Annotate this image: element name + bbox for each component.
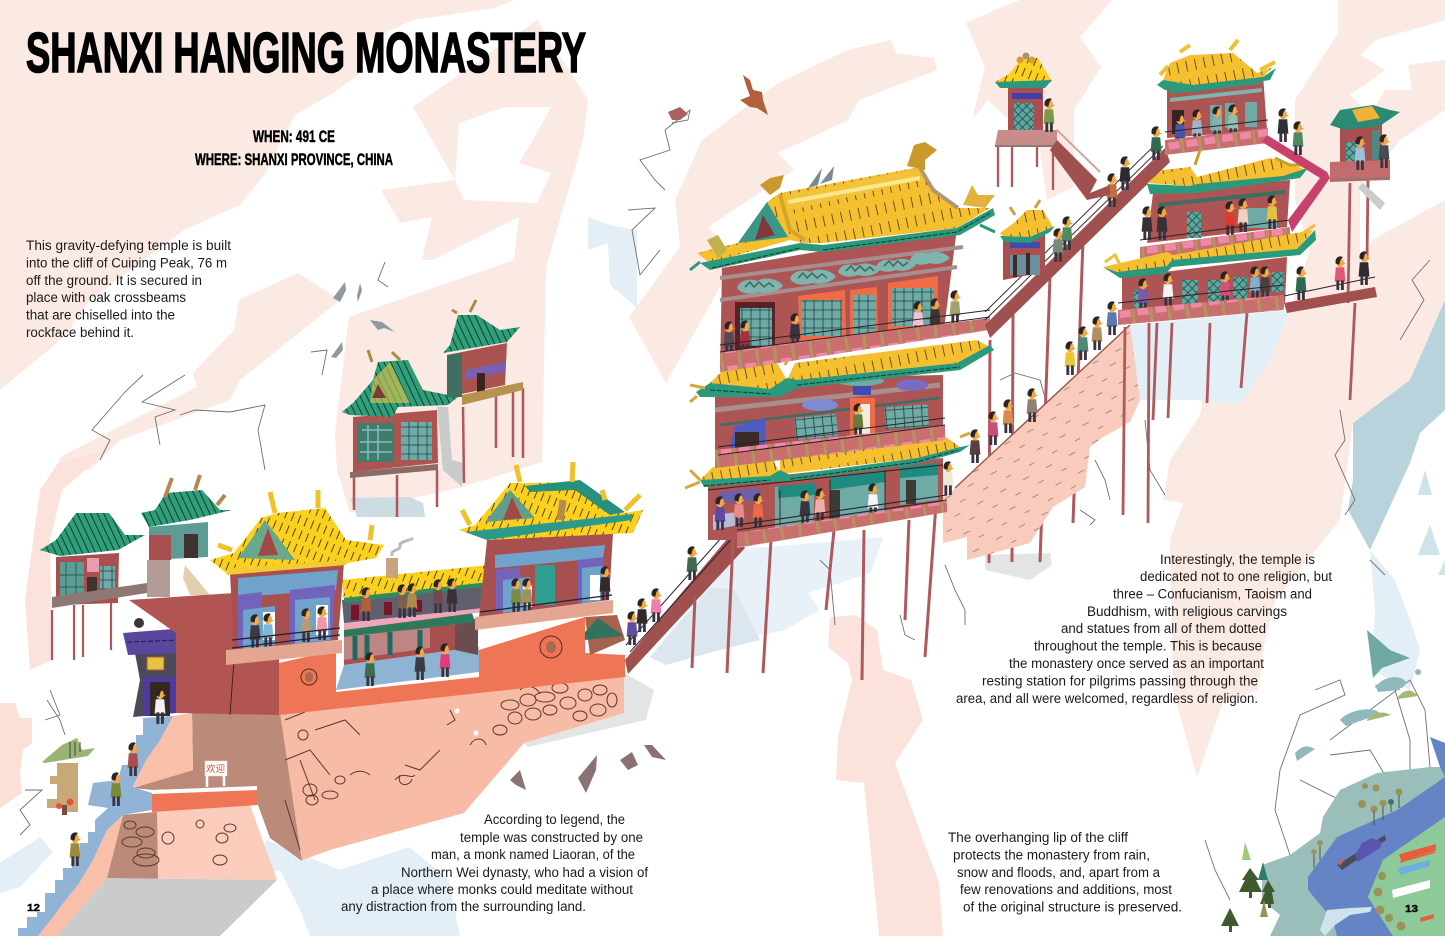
courtyard gallery with yellow roof: [336, 538, 489, 692]
long stair from main temple to upper temple: [985, 126, 1170, 338]
lower stair with visitors to the main temple: [625, 528, 745, 674]
text block: legend of Liaoran: According to legend, the: [484, 812, 625, 827]
text block: overhanging lip: of the original structure is preserved.: [963, 900, 1182, 914]
page number left: 12: [27, 902, 40, 914]
text block: gravity-defying temple: [26, 238, 231, 340]
left blue hall: [210, 490, 384, 665]
blue stone staircase and walkers: [18, 690, 173, 936]
small tower at top with stair: [995, 52, 1110, 200]
text block: gravity-defying temple: into the cliff of Cuiping Peak, 76 m: [26, 256, 227, 270]
welcome sign: [205, 761, 227, 787]
grey oar under right tower: [1358, 183, 1385, 210]
text block: gravity-defying temple: off the ground. It is secured in: [26, 273, 202, 288]
birds below the wall: [510, 745, 666, 793]
text block: three religions: the monastery once served as an important: [1009, 656, 1264, 671]
fortress wall: [129, 593, 625, 715]
text block: overhanging lip: The overhanging lip of the cliff: [948, 830, 1128, 845]
main temple: top storey: [720, 228, 990, 372]
text block: three religions: dedicated not to one religion, but: [1140, 569, 1332, 584]
welcome sign: 欢迎: [206, 763, 226, 775]
text block: legend of Liaoran: temple was constructed by one: [460, 830, 643, 845]
far left towers with walkway: [40, 475, 232, 660]
text block: legend of Liaoran: any distraction from the surrounding land.: [341, 899, 586, 914]
main temple stilts: [692, 240, 1083, 680]
text block: legend of Liaoran: man, a monk named Liaoran, of the: [431, 847, 635, 862]
birds around the middle pavilion: [331, 282, 395, 358]
text block: three religions: resting station for pilgrims passing through the: [982, 674, 1258, 688]
main temple: lower roof: [685, 433, 970, 488]
text block: three religions: three – Confucianism, Taoism and: [1113, 586, 1312, 602]
text block: three religions: area, and all were welcomed, regardless of religion.: [956, 691, 1258, 706]
title: SHANXI HANGING MONASTERY: [26, 21, 586, 85]
pink stairs to right tower: [1262, 108, 1330, 232]
text block: legend of Liaoran: [341, 812, 648, 914]
upper temple: middle storey: [1140, 150, 1308, 260]
text block: overhanging lip: snow and floods, and, apart from a: [957, 865, 1161, 880]
text block: three religions: and statues from all of them dotted: [1061, 621, 1266, 636]
text block: three religions: Interestingly, the temple is: [1160, 552, 1315, 567]
river valley landscape: [1221, 630, 1445, 936]
text block: gravity-defying temple: This gravity-defying temple is built: [26, 238, 231, 253]
text block: legend of Liaoran: Northern Wei dynasty, who had a vision of: [401, 865, 648, 880]
text block: gravity-defying temple: rockface behind it.: [26, 325, 134, 340]
text block: gravity-defying temple: that are chiselled into the: [26, 308, 175, 322]
right tower: [1330, 105, 1400, 182]
upper temple: lower storey and walkway: [1103, 225, 1377, 325]
text block: overhanging lip: [948, 830, 1182, 914]
main temple: middle roof: [690, 340, 994, 402]
text block: three religions: [956, 552, 1332, 706]
small pavilions on the upper left cliff: [342, 300, 523, 517]
upper temple: top pavilion: [1157, 40, 1276, 155]
main temple: upper roof with dragons and pigeons: [690, 142, 995, 270]
gate house: [123, 618, 186, 722]
date and place heading: WHERE: SHANXI PROVINCE, CHINA: [195, 150, 393, 169]
small temple beside long stair: [1000, 200, 1055, 280]
salmon stepped slope: [943, 301, 1140, 560]
main temple: middle storey: [715, 375, 945, 468]
roadside shrine: [42, 738, 95, 815]
date and place heading: [195, 127, 393, 169]
text block: gravity-defying temple: place with oak crossbeams: [26, 290, 186, 305]
text block: legend of Liaoran: a place where monks could meditate without: [371, 882, 633, 897]
page number right: 13: [1405, 903, 1418, 915]
bird of prey and nest at top: [668, 75, 768, 120]
salmon rock base with brickwork: [38, 670, 624, 936]
text block: three religions: throughout the temple. This is because: [1034, 638, 1262, 654]
right blue hall: [459, 462, 643, 630]
upper temple stilts: [1123, 180, 1368, 523]
main temple: [685, 142, 995, 548]
main temple: ground storey: [708, 458, 947, 548]
text block: three religions: Buddhism, with religious carvings: [1087, 604, 1287, 619]
date and place heading: WHEN: 491 CE: [253, 127, 335, 146]
upper temple: [1103, 40, 1377, 325]
text block: overhanging lip: few renovations and additions, most: [960, 882, 1172, 897]
text block: overhanging lip: protects the monastery from rain,: [953, 848, 1150, 862]
